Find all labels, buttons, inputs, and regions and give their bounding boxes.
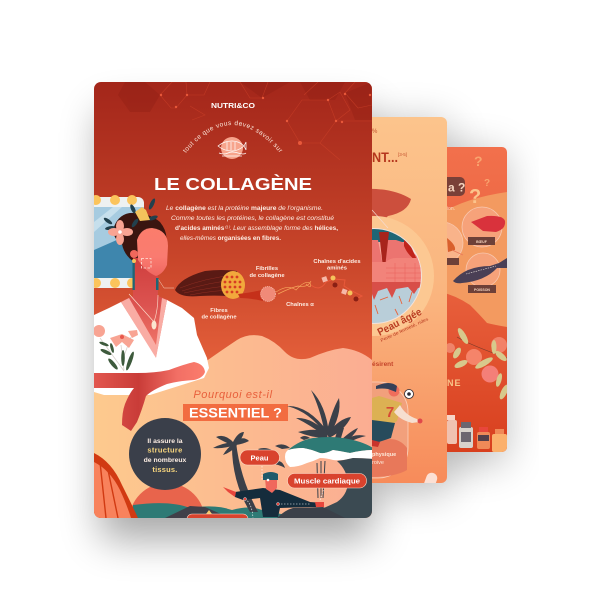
- question marks: ?: [469, 186, 481, 208]
- label: peau: [240, 450, 280, 465]
- callout: structure: structure: [147, 446, 183, 454]
- necklace: [129, 294, 158, 322]
- peaches and leaves illustration: [447, 328, 507, 400]
- ear: [130, 250, 138, 258]
- sun: [129, 483, 205, 559]
- panel: main card: [94, 82, 372, 518]
- face silhouette: [372, 188, 411, 218]
- food circle: partial: [447, 222, 464, 265]
- subtitle fragment: ion.: [447, 206, 455, 212]
- diagram labels: Chaînes α: [286, 302, 314, 308]
- mirror: [94, 195, 144, 288]
- title: LE COLLAGÈNE: [154, 173, 312, 194]
- food circle: beef: BŒUF: [476, 240, 488, 244]
- rock wave: [277, 437, 373, 518]
- diagram labels: [201, 259, 361, 320]
- footballer: [372, 383, 422, 447]
- pill shape: [424, 472, 438, 483]
- heading fragment: NE: [447, 378, 462, 388]
- white blouse: [94, 300, 209, 395]
- arched subtitle: tout ce que vous devez savoir sur: [183, 120, 282, 152]
- food circle: fish: [453, 253, 507, 293]
- connector: [158, 279, 174, 288]
- earrings: [132, 259, 158, 290]
- skin label: Peau âgée: [376, 306, 424, 339]
- athlete panel: roive: [372, 460, 384, 466]
- label: peau: Peau: [251, 454, 269, 462]
- brand logo: NUTRI&CO: [211, 101, 255, 110]
- intro paragraph: [166, 205, 338, 242]
- callout: structure: tissus.: [152, 465, 178, 474]
- hair flowers: [103, 198, 158, 245]
- dark hexagon tints: [118, 82, 372, 120]
- food circle: fish: POISSON: [474, 288, 490, 292]
- subheading: ésirent: [372, 361, 394, 368]
- question marks: ?: [484, 178, 490, 189]
- footballer: 7: [386, 404, 394, 421]
- athlete panel: physique: [372, 452, 396, 458]
- skin zoom marker: [142, 258, 151, 268]
- amino acid chains: [276, 279, 362, 298]
- question marks: [470, 156, 490, 203]
- panel: middle card: %: [372, 129, 378, 135]
- diagram labels: Fibres: [210, 308, 228, 314]
- subheading: Pourquoi est-il: [193, 389, 273, 401]
- callout: structure: [129, 418, 201, 490]
- collagen diagram: [151, 259, 362, 320]
- heading pill fragment: [447, 177, 465, 196]
- diagram labels: Chaînes d'acides: [313, 259, 361, 265]
- diagram labels: aminés: [327, 266, 347, 272]
- callout: structure: Il assure la: [147, 438, 183, 445]
- diagram labels: Fibrilles: [256, 266, 278, 272]
- callout: structure: de nombreux: [144, 457, 187, 464]
- intro paragraph: Le collagène est la protéine majeure de l'organisme.: [166, 205, 323, 212]
- neck: [124, 258, 168, 352]
- question marks: ?: [474, 153, 483, 169]
- surfboard: [94, 453, 138, 518]
- panel: middle card: [372, 117, 447, 483]
- palm tree: right: [275, 390, 366, 449]
- decorative background blob: [447, 192, 507, 327]
- figure stretching: [223, 466, 324, 518]
- food circle: beef: [462, 207, 505, 247]
- woman portrait: [93, 198, 209, 431]
- intro paragraph: elles-mêmes organisées en fibres.: [180, 235, 281, 242]
- heading fragment: NT...: [372, 149, 398, 165]
- skin label: Perte de fermeté, rides: [380, 316, 430, 343]
- intro paragraph: Comme toutes les protéines, le collagène est constitué: [171, 215, 335, 222]
- panel: back card: [447, 147, 507, 452]
- fibril: [238, 286, 276, 302]
- supplement bottles: [447, 415, 507, 452]
- intro paragraph: d'acides aminés ⁽¹⁾. Leur assemblage forme des hélices,: [175, 225, 338, 232]
- hexagon nodes: [160, 93, 371, 145]
- label: muscle cardiaque: Muscle cardiaque: [294, 478, 360, 486]
- infographic mockup: three stacked cards: [76, 82, 528, 564]
- diagram labels: de collagène: [249, 273, 285, 279]
- icon: fish medallion: [218, 137, 246, 159]
- pink collar: [121, 298, 167, 358]
- palm tree: left: [213, 432, 285, 512]
- diagram labels: de collagène: [201, 314, 237, 320]
- landscape: [94, 453, 300, 559]
- hexagon pattern: [160, 82, 372, 160]
- peach wave background: [94, 335, 372, 518]
- skin cross-section circle: [372, 210, 434, 336]
- essentiel heading: ESSENTIEL ?: [189, 404, 282, 420]
- arm: [94, 362, 205, 431]
- athlete panel: [372, 382, 408, 478]
- label: muscle cardiaque: [288, 474, 366, 488]
- collagen fibre bundle: [175, 270, 245, 299]
- flower on blouse: [93, 325, 138, 371]
- hair: [113, 213, 166, 262]
- label: cut-off pill: [187, 514, 248, 526]
- heading pill fragment: a ?: [448, 180, 465, 194]
- drop shadows: [100, 110, 506, 540]
- panel: middle card: [3-5]: [398, 152, 407, 157]
- face: [137, 228, 168, 276]
- hills: [133, 503, 300, 518]
